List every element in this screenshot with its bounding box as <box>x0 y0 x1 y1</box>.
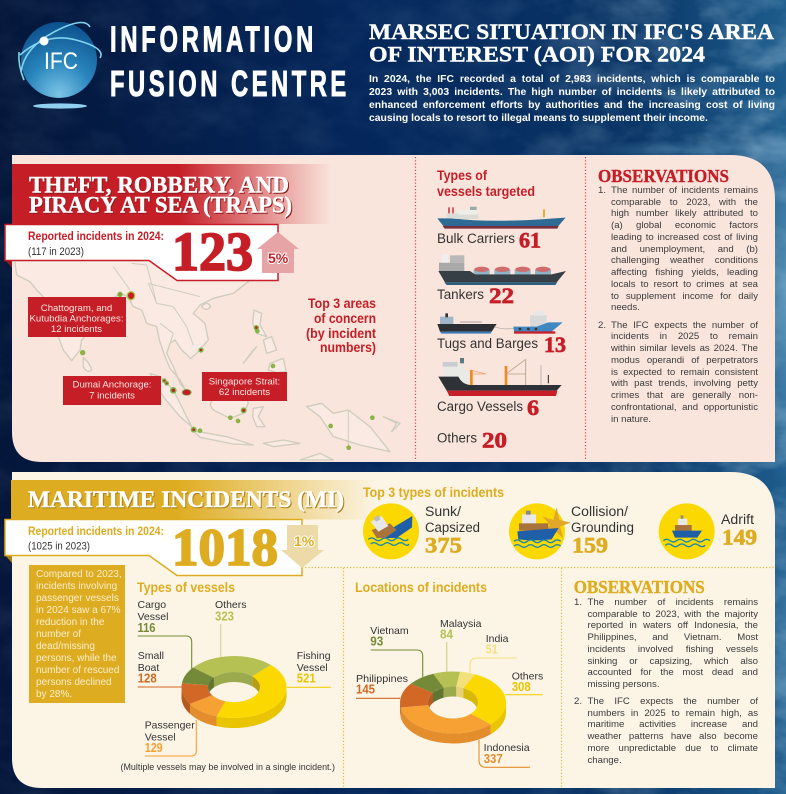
callout: passenger vessels note: persons declined <box>36 677 112 688</box>
heading: types of vessels: Types of vessels <box>137 579 235 595</box>
callout: passenger vessels note: by 28%. <box>36 689 72 700</box>
callout: Chattogram <box>28 297 126 337</box>
icon: sunk or capsized <box>363 503 419 559</box>
label: Vietnam 93: 93 <box>370 634 383 648</box>
heading: top 3 areas of concern: (by incident <box>306 325 376 341</box>
callout: passenger vessels note <box>29 565 125 704</box>
label: cargo vessels 6: 6 <box>527 395 539 420</box>
arrow: up 5%: 5% <box>268 250 289 266</box>
callout: passenger vessels note: number of <box>36 629 81 640</box>
text: TRAPS observations list: modus operandi of perpetrators <box>611 355 758 366</box>
text: TRAPS observations list: needs. <box>611 302 640 313</box>
text: MI observations list <box>574 597 764 772</box>
label: others 323: 323 <box>215 610 234 624</box>
arrow: down 1%: 1% <box>294 533 315 549</box>
arrow: up 5% <box>257 232 299 273</box>
header: organisation name: INFORMATION <box>110 20 313 60</box>
arrow: down 1% <box>281 525 324 568</box>
text: TRAPS observations list: The IFC expects the number of <box>611 320 758 331</box>
label: Philippines 145: Philippines <box>356 673 408 685</box>
header: organisation name: FUSION CENTRE <box>110 64 346 104</box>
text: MI observations list: missing persons. <box>588 679 659 690</box>
label: Indonesia 337: Indonesia <box>484 742 530 754</box>
chart: types of vessels donut <box>182 656 287 728</box>
callout: Dumai <box>63 376 161 405</box>
label: fishing vessel 521: Fishing <box>297 650 331 662</box>
ribbon: reported incidents 1018: 1018 <box>172 519 278 577</box>
callout: passenger vessels note: in 2024 saw a 67% <box>36 605 121 616</box>
heading: types of vessels targeted: Types of <box>437 167 487 183</box>
label: small boat 128 <box>138 650 164 686</box>
chart leaders: types of vessels <box>138 624 331 756</box>
heading: top 3 types of incidents: Top 3 types of incidents <box>363 484 504 500</box>
text: TRAPS observations list: leading to increased cost of living <box>611 232 758 243</box>
label: cargo vessel 116: 116 <box>138 621 156 635</box>
callout: Chattogram: Chattogram, and <box>41 303 112 314</box>
label: collision grounding 159 <box>571 504 634 558</box>
label: collision grounding 159: 159 <box>572 532 608 558</box>
callout: Singapore Strait: Singapore Strait: <box>209 376 280 388</box>
text: TRAPS observations list: (a) global economic factors <box>611 220 758 231</box>
panel: maritime incidents <box>5 472 775 788</box>
label: Indonesia 337 <box>484 742 530 766</box>
label: Malaysia 84 <box>440 618 482 642</box>
label: fishing vessel 521: Vessel <box>297 662 328 674</box>
chart: locations of incidents donut <box>400 672 506 744</box>
label: Malaysia 84: 84 <box>440 628 453 642</box>
label: passenger vessel 129 <box>145 720 195 755</box>
callout: Chattogram: 12 incidents <box>51 324 102 335</box>
label: cargo vessel 116: Cargo <box>138 599 166 611</box>
label: tankers 22: Tankers <box>437 287 484 302</box>
text: TRAPS observations list: is expected to remain consistent <box>611 367 758 378</box>
label: sunk capsized 375 <box>425 504 480 558</box>
header: main title: MARSEC SITUATION IN IFC'S AREA <box>369 19 774 44</box>
text: MI observations list: comparable to 2023, with the majority <box>588 609 758 620</box>
text: MI observations list: maritime activities increase and <box>588 719 758 730</box>
text: MI observations list: numbers in 2025 to remain high, as <box>588 708 758 719</box>
text: TRAPS observations list: 1. <box>598 185 606 196</box>
heading: locations of incidents: Locations of incidents <box>355 579 487 595</box>
text: MI observations list: accounted for the most dead and <box>588 667 758 678</box>
text: TRAPS observations list: 2. <box>598 320 606 331</box>
label: India 51: India <box>486 633 509 645</box>
text: MI observations list: weather patterns have also become <box>588 731 758 742</box>
icon: cargo vessel <box>438 358 562 396</box>
header: intro paragraph: causing locals to resort to illegal means to supplement their income. <box>369 112 708 124</box>
banner: TRAPS title: THEFT, ROBBERY, AND <box>29 172 289 198</box>
icon: tug and barge <box>437 311 563 334</box>
label: passenger vessel 129: Vessel <box>145 731 176 743</box>
callout: passenger vessels note: Compared to 2023, <box>36 569 122 580</box>
text: TRAPS observations list: and unemployment, and (b) <box>611 244 758 255</box>
label: tugs and barges 13: 13 <box>544 332 566 357</box>
heading: TRAPS observations: OBSERVATIONS <box>598 166 729 186</box>
map: incident hotspots <box>80 291 375 450</box>
label: small boat 128: Boat <box>138 662 159 674</box>
ribbon: reported incidents 1018: (1025 in 2023) <box>28 540 90 552</box>
text: TRAPS observations list: high number likely attributed to <box>611 208 758 219</box>
callout: passenger vessels note: passenger vessels <box>36 593 119 604</box>
label: bulk carriers 61: Bulk Carriers <box>437 231 515 246</box>
label: cargo vessel 116: Vessel <box>138 611 168 623</box>
heading: types of vessels targeted <box>437 167 535 199</box>
label: small boat 128: 128 <box>138 672 157 686</box>
label: others 20: Others <box>437 430 477 446</box>
label: adrift 149: 149 <box>722 524 757 550</box>
label: adrift 149: Adrift <box>721 512 754 527</box>
label: others 323: Others <box>215 599 247 611</box>
label: others 323 <box>215 599 247 624</box>
ribbon: reported incidents 1018: Reported incidents in 2024: <box>28 524 164 538</box>
ribbon: reported incidents 1018 <box>5 519 302 577</box>
heading: top 3 areas of concern: numbers) <box>320 339 376 355</box>
ribbon: reported incidents 123: (117 in 2023) <box>28 246 84 258</box>
text: TRAPS observations list: comparable to 2023, with the <box>611 197 758 208</box>
heading: MI observations: OBSERVATIONS <box>574 577 705 597</box>
banner: TRAPS title <box>12 164 332 224</box>
label: cargo vessels 6 <box>437 395 539 420</box>
header: main title: OF INTEREST (AOI) FOR 2024 <box>369 42 705 66</box>
text: MI observations list: change. <box>588 755 622 766</box>
label: collision grounding 159: Collision/ <box>571 504 628 519</box>
label: adrift 149 <box>721 512 757 550</box>
callout: passenger vessels note: persons, while the <box>36 653 117 664</box>
heading: top 3 areas of concern <box>306 295 376 355</box>
chart leaders: locations <box>356 642 543 767</box>
label: Others 308: 308 <box>512 680 531 694</box>
text: MI observations list: Philippines, and Vietnam. Most <box>588 632 758 643</box>
label: others 20: 20 <box>482 428 507 452</box>
heading: top 3 areas of concern: of concern <box>314 310 376 326</box>
text: TRAPS observations list: The number of incidents remains <box>611 185 758 196</box>
header: intro paragraph: In 2024, the IFC recorded a total of 2,983 incidents, which is comparable to <box>369 74 775 84</box>
header: organisation name <box>110 20 346 104</box>
label: tankers 22: 22 <box>489 283 514 308</box>
text: TRAPS observations list: locals to resort to crimes at sea <box>611 279 758 290</box>
label: others 20 <box>437 428 507 452</box>
text: MI observations list: reported in waters off Indonesia, the <box>588 620 758 631</box>
callout: passenger vessels note: dead/missing <box>36 641 95 652</box>
label: fishing vessel 521: 521 <box>297 672 316 686</box>
label: bulk carriers 61: 61 <box>519 228 541 252</box>
note: multiple vessels: (Multiple vessels may be involved in a single incident.) <box>120 762 335 772</box>
header: IFC logo <box>19 22 101 109</box>
label: Vietnam 93 <box>370 625 409 648</box>
label: small boat 128: Small <box>138 650 164 662</box>
label: cargo vessels 6: Cargo Vessels <box>437 399 523 414</box>
text: MI observations list: sinking or capsizing, which also <box>588 656 758 667</box>
header: IFC logo: IFC <box>44 48 78 75</box>
label: fishing vessel 521 <box>297 650 331 686</box>
heading: types of vessels targeted: vessels targeted <box>437 183 535 199</box>
text: TRAPS observations list: to supplement income for daily <box>611 291 758 302</box>
label: Indonesia 337: 337 <box>484 752 503 766</box>
text: TRAPS observations list: with past trends, involving petty <box>611 378 758 389</box>
heading: top 3 areas of concern: Top 3 areas <box>308 295 376 311</box>
label: Philippines 145: 145 <box>356 682 375 696</box>
label: India 51: 51 <box>486 642 498 656</box>
ribbon: reported incidents 123: 123 <box>172 221 253 282</box>
label: passenger vessel 129: 129 <box>145 741 163 755</box>
label: Others 308 <box>512 670 543 694</box>
callout: Dumai: Dumai Anchorage: <box>73 380 151 390</box>
header: intro paragraph: 2023 with 3,003 incidents. The high number of incidents is likely attributed to <box>369 86 775 98</box>
text: TRAPS observations list: incidents in 2025 to remain <box>611 331 758 342</box>
label: sunk capsized 375: Sunk/ <box>425 504 461 519</box>
label: sunk capsized 375: Capsized <box>425 520 480 535</box>
text: TRAPS observations list <box>598 185 763 425</box>
label: Malaysia 84: Malaysia <box>440 618 482 630</box>
label: Others 308: Others <box>512 670 543 682</box>
label: sunk capsized 375: 375 <box>425 532 462 558</box>
text: MI observations list: incidents involved fishing vessels <box>588 644 758 655</box>
header: main title <box>369 19 774 66</box>
callout: passenger vessels note: reduction in the <box>36 617 104 628</box>
label: bulk carriers 61 <box>437 228 541 252</box>
text: MI observations list: The number of incidents remains <box>588 597 758 608</box>
label: passenger vessel 129: Passenger <box>145 720 195 732</box>
callout: Dumai: 7 incidents <box>89 390 135 402</box>
callout: Singapore Strait: 62 incidents <box>219 387 270 398</box>
text: TRAPS observations list: crimes that are generally non- <box>611 390 758 401</box>
text: MI observations list: more unpredictable due to climate <box>588 743 758 754</box>
icon: bulk carrier <box>437 207 566 229</box>
map of Southeast Asia <box>13 250 400 460</box>
text: MI observations list: 2. <box>574 696 582 707</box>
label: tankers 22 <box>437 283 514 308</box>
label: Vietnam 93: Vietnam <box>370 625 409 637</box>
icon: tanker <box>438 255 566 285</box>
panel: theft, robbery and piracy at sea <box>5 155 775 462</box>
label: India 51 <box>486 633 509 656</box>
text: MI observations list: 1. <box>574 597 582 608</box>
banner: TRAPS title: PIRACY AT SEA (TRAPS) <box>29 192 292 218</box>
icon: adrift <box>659 503 715 559</box>
callout: passenger vessels note: incidents involving <box>36 581 117 592</box>
text: TRAPS observations list: affecting fishing yields, leading <box>611 267 758 278</box>
banner: MI title <box>11 480 378 520</box>
callout: Chattogram: Kutubdia Anchorages: <box>30 314 124 324</box>
label: cargo vessel 116 <box>138 599 168 635</box>
header: intro paragraph: enhanced enforcement efforts by authorities and the increasing cost of living <box>369 100 775 110</box>
banner: MI title: MARITIME INCIDENTS (MI) <box>28 487 344 512</box>
header: intro paragraph <box>369 72 775 126</box>
icon: collision or grounding <box>509 503 571 559</box>
text: MI observations list: The IFC expects the number of <box>588 696 758 707</box>
callout: passenger vessels note: number of rescued <box>36 665 119 676</box>
label: Philippines 145 <box>356 673 408 696</box>
label: tugs and barges 13 <box>437 332 566 357</box>
ribbon: reported incidents 123: Reported incidents in 2024: <box>28 229 164 243</box>
label: collision grounding 159: Grounding <box>571 520 634 535</box>
label: tugs and barges 13: Tugs and Barges <box>437 336 538 351</box>
text: TRAPS observations list: challenging weather conditions <box>611 255 758 266</box>
text: TRAPS observations list: in nature. <box>611 414 651 425</box>
text: TRAPS observations list: confrontational, and opportunistic <box>611 402 758 413</box>
text: TRAPS observations list: within similar levels as 2024. The <box>611 343 758 354</box>
callout: Singapore Strait <box>202 372 287 401</box>
ribbon: reported incidents 123 <box>5 221 278 282</box>
